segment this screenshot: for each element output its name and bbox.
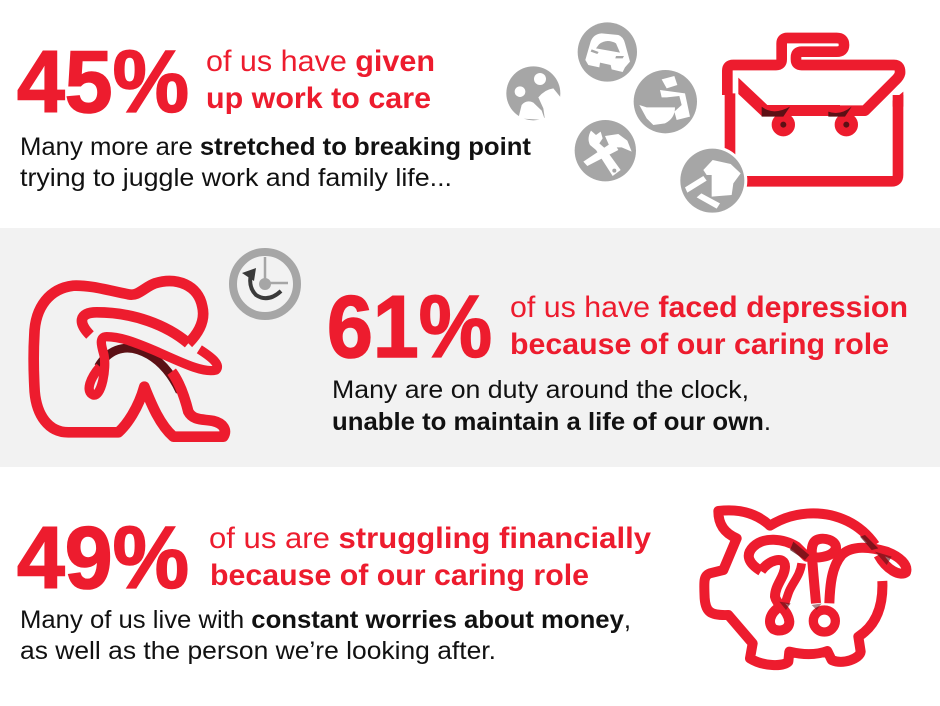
statistic: 45%: 45% bbox=[17, 32, 189, 131]
icon: tools circle bbox=[575, 120, 636, 181]
icon: clothes circle bbox=[677, 146, 747, 216]
text block: stretched to breaking point: trying to juggle work and family life... bbox=[20, 164, 452, 192]
text block: worries about money: as well as the person we’re looking after. bbox=[20, 637, 496, 665]
text block: on duty around the clock bbox=[332, 376, 771, 436]
statistic: 49%: 49% bbox=[17, 508, 189, 607]
icon: seated figure bbox=[34, 281, 225, 437]
text block: stretched to breaking point bbox=[20, 133, 532, 192]
heading: faced depression: of us have faced depression bbox=[510, 291, 908, 324]
heading: given up work bbox=[206, 45, 435, 115]
text block: worries about money bbox=[20, 606, 631, 665]
heading: faced depression bbox=[510, 291, 908, 361]
heading: struggling financially: of us are struggling financially bbox=[209, 522, 651, 555]
heading: struggling financially: because of our caring role bbox=[210, 559, 589, 592]
heading: given up work: of us have given bbox=[206, 45, 435, 78]
heading: struggling financially bbox=[209, 522, 651, 592]
panel: giving up work bbox=[17, 22, 903, 216]
icon: family circle bbox=[506, 66, 561, 120]
text block: worries about money: Many of us live with constant worries about money , bbox=[20, 606, 631, 634]
statistic: 61%: 61% bbox=[327, 277, 492, 376]
heading: faced depression: because of our caring role bbox=[510, 328, 889, 361]
panel: depression background bbox=[0, 228, 940, 467]
panel: depression bbox=[34, 252, 908, 437]
text block: on duty around the clock: Many are on duty around the clock, bbox=[332, 376, 749, 404]
text block: stretched to breaking point: Many more are stretched to breaking point bbox=[20, 133, 532, 161]
icon: briefcase bbox=[727, 38, 903, 181]
heading: given up work: up work to care bbox=[206, 82, 431, 115]
panel: financial struggle bbox=[17, 508, 906, 665]
icon: food circle bbox=[634, 70, 697, 133]
icon: clock bbox=[233, 252, 297, 316]
icon: car circle bbox=[578, 22, 637, 82]
text block: on duty around the clock: unable to maintain a life of our own . bbox=[332, 408, 771, 436]
icon: piggy bank bbox=[704, 510, 906, 665]
